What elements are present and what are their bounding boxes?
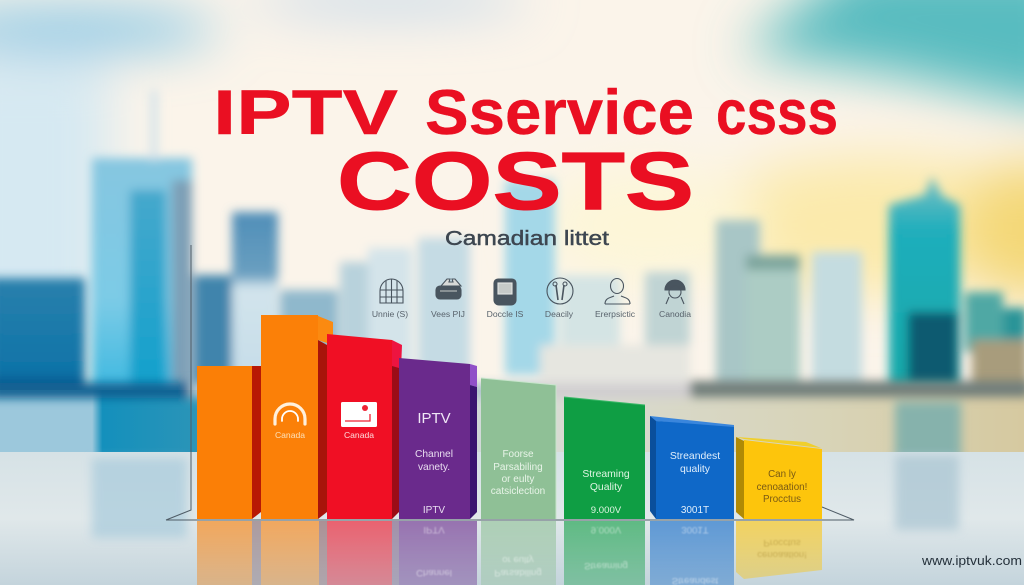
reflected bar text: 9.000V (591, 524, 622, 535)
bar 4: purple IPTV: Channel (415, 449, 453, 460)
bar 7: blue: quality (680, 464, 711, 475)
icon: screen (341, 402, 377, 427)
title: IPTV Service costs: IPTV (213, 78, 398, 148)
bar 4: purple IPTV: vanety. (418, 462, 450, 473)
bar 3: red with icon: Canada (344, 430, 374, 440)
icon: arch signal (275, 404, 305, 424)
icon: car (436, 279, 461, 299)
reflected bar text: or eulty (502, 554, 534, 565)
bar 6: green (564, 397, 645, 519)
bar 8: yellow: Procctus (763, 494, 801, 505)
icon labels: Unnie (S) (372, 309, 408, 319)
reflected bar text: Procctus (763, 537, 801, 548)
bar reflections (197, 521, 822, 585)
bar 8: yellow: Can ly (768, 469, 796, 480)
subtitle: Camadian littet (445, 228, 610, 250)
reflected bar text: IPTV (423, 524, 445, 535)
icon labels: Vees PIJ (431, 309, 465, 319)
icon row (380, 278, 685, 305)
icon labels: Deacily (545, 309, 574, 319)
icon: globe cage (380, 279, 403, 303)
title: IPTV Service costs: Sservice (425, 78, 694, 148)
bar 1: orange (197, 366, 261, 519)
icon labels: Canodia (659, 309, 691, 319)
reflected bar text: Streaming (584, 560, 628, 571)
bar 3: red with icon (327, 334, 402, 519)
icon labels (372, 309, 691, 319)
reflected bar text: Channel (416, 567, 452, 578)
bar 8: yellow (736, 437, 822, 519)
reflected bar text: cenoaation! (757, 549, 807, 560)
reflected bar text: 3001T (681, 524, 709, 535)
bar 5: pale green: or eulty (502, 474, 534, 485)
bar 5: pale green: catsiclection (491, 486, 545, 497)
bar 7: blue: Streandest (670, 451, 720, 462)
bar 4: purple IPTV (399, 358, 477, 519)
reflected bar text (416, 524, 807, 585)
bar 7: blue: 3001T (681, 505, 709, 516)
reflected bar text: Parsabiling (494, 567, 542, 578)
icon: device (494, 279, 516, 305)
icon labels: Doccle IS (487, 309, 524, 319)
title: IPTV Service costs: csss (716, 78, 838, 148)
bar 4: purple IPTV: IPTV (423, 505, 445, 516)
bar 2: orange with icon: Canada (275, 430, 305, 440)
bar 5: pale green: Parsabiling (493, 462, 543, 473)
icon: helmet figure (665, 280, 685, 304)
bar 6: green: 9.000V (591, 505, 622, 516)
icon: earbuds circle (547, 278, 573, 304)
bar 5: pale green: Foorse (502, 449, 534, 460)
bar 6: green: Streaming (582, 469, 630, 480)
bar chart (197, 315, 822, 519)
icon: person (605, 278, 630, 304)
chart axes (166, 245, 854, 520)
title: IPTV Service costs: COSTS (337, 136, 694, 227)
icon labels: Ererpsictic (595, 309, 636, 319)
bar 2: orange with icon (261, 315, 333, 519)
bar 5: pale green (481, 378, 556, 519)
title: IPTV Service costs (213, 78, 838, 227)
bar 6: green: Quality (590, 482, 623, 493)
bar 8: yellow: cenoaation! (757, 482, 807, 493)
bar 7: blue (650, 416, 734, 519)
website url: www.iptvuk.com (921, 554, 1022, 568)
bar 4: purple IPTV: IPTV (417, 410, 451, 427)
